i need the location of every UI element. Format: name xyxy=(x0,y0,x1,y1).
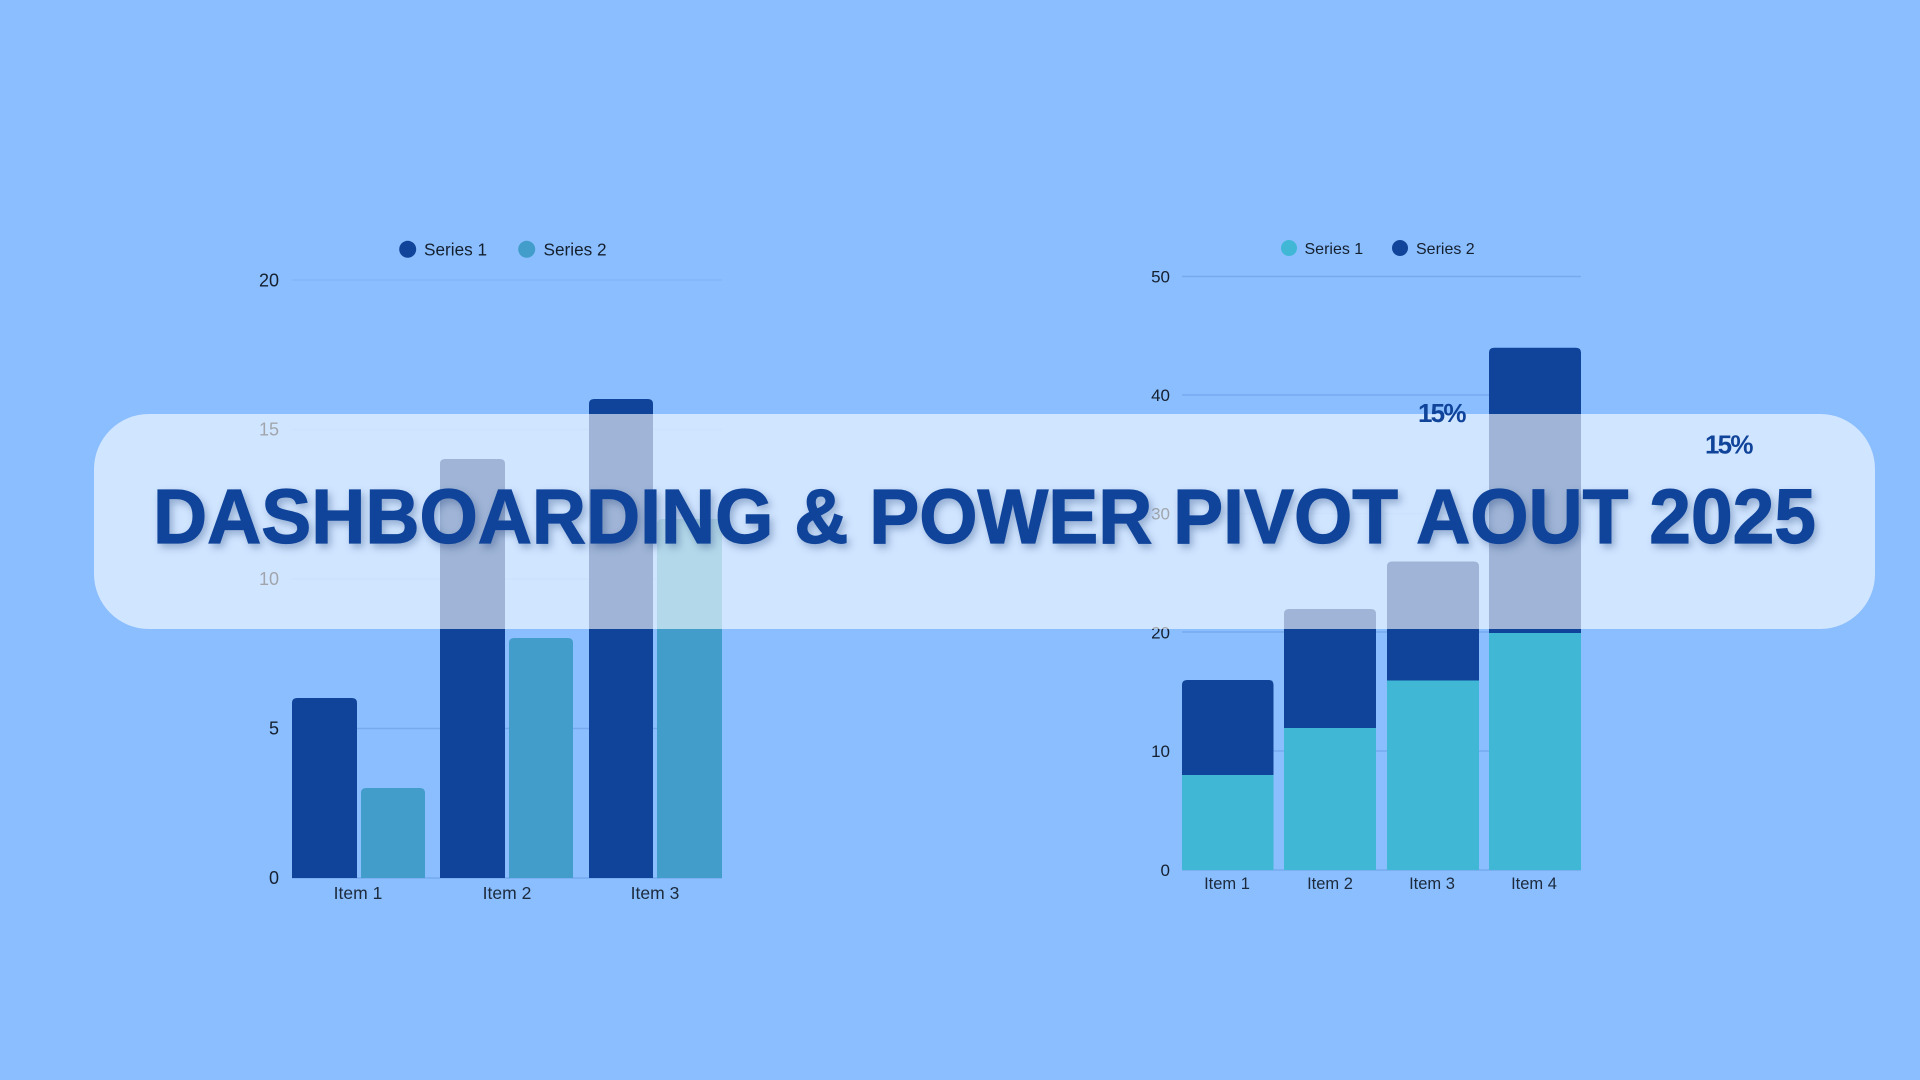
legend: left chart: Series 2 xyxy=(544,240,607,260)
x axis labels: left chart xyxy=(334,883,679,903)
bars: series 2 right chart xyxy=(1182,348,1581,775)
x axis labels: right chart xyxy=(1204,875,1557,893)
title banner panel xyxy=(94,414,1875,629)
x axis labels: left chart: Item 3 xyxy=(631,883,679,903)
y axis: right chart: 10 xyxy=(1151,742,1170,761)
x axis labels: right chart: Item 4 xyxy=(1511,875,1557,893)
percentage label: second 15%: 15% xyxy=(1705,430,1753,460)
y axis: right chart: 50 xyxy=(1151,268,1170,286)
legend: left chart: Series 1 xyxy=(424,240,487,260)
y axis: left chart: 20 xyxy=(259,270,279,290)
y axis: right chart: 20 xyxy=(1151,624,1170,642)
x axis labels: left chart: Item 2 xyxy=(483,883,531,903)
y axis: left chart: 15 xyxy=(259,420,279,440)
legend: left chart xyxy=(399,240,607,260)
percentage label: first 15%: 15% xyxy=(1418,398,1466,428)
y axis: left chart: 0 xyxy=(269,868,279,888)
y axis: right chart xyxy=(1151,268,1170,880)
clustered bar chart: left xyxy=(259,240,722,903)
y axis: left chart: 10 xyxy=(259,569,279,589)
bars: series 2 left chart xyxy=(361,519,722,878)
legend: right chart xyxy=(1281,240,1475,258)
x axis labels: right chart: Item 1 xyxy=(1204,875,1250,893)
bars: series 1 right chart xyxy=(1182,633,1581,870)
stacked bar chart: right xyxy=(1151,240,1581,893)
x axis labels: left chart: Item 1 xyxy=(334,883,382,903)
x axis labels: right chart: Item 2 xyxy=(1307,875,1353,893)
y axis: left chart: 5 xyxy=(269,718,279,738)
y axis: right chart: 30 xyxy=(1151,504,1170,524)
x axis labels: right chart: Item 3 xyxy=(1409,875,1455,893)
y axis: right chart: 40 xyxy=(1151,386,1170,405)
legend: right chart: Series 2 xyxy=(1416,241,1475,258)
y axis: left chart xyxy=(259,270,279,888)
bars: series 1 left chart xyxy=(292,399,653,878)
legend: right chart: Series 1 xyxy=(1304,241,1363,258)
y axis: right chart: 0 xyxy=(1161,861,1170,880)
title: DASHBOARDING & POWER PIVOT AOUT 2025 xyxy=(153,474,1816,560)
